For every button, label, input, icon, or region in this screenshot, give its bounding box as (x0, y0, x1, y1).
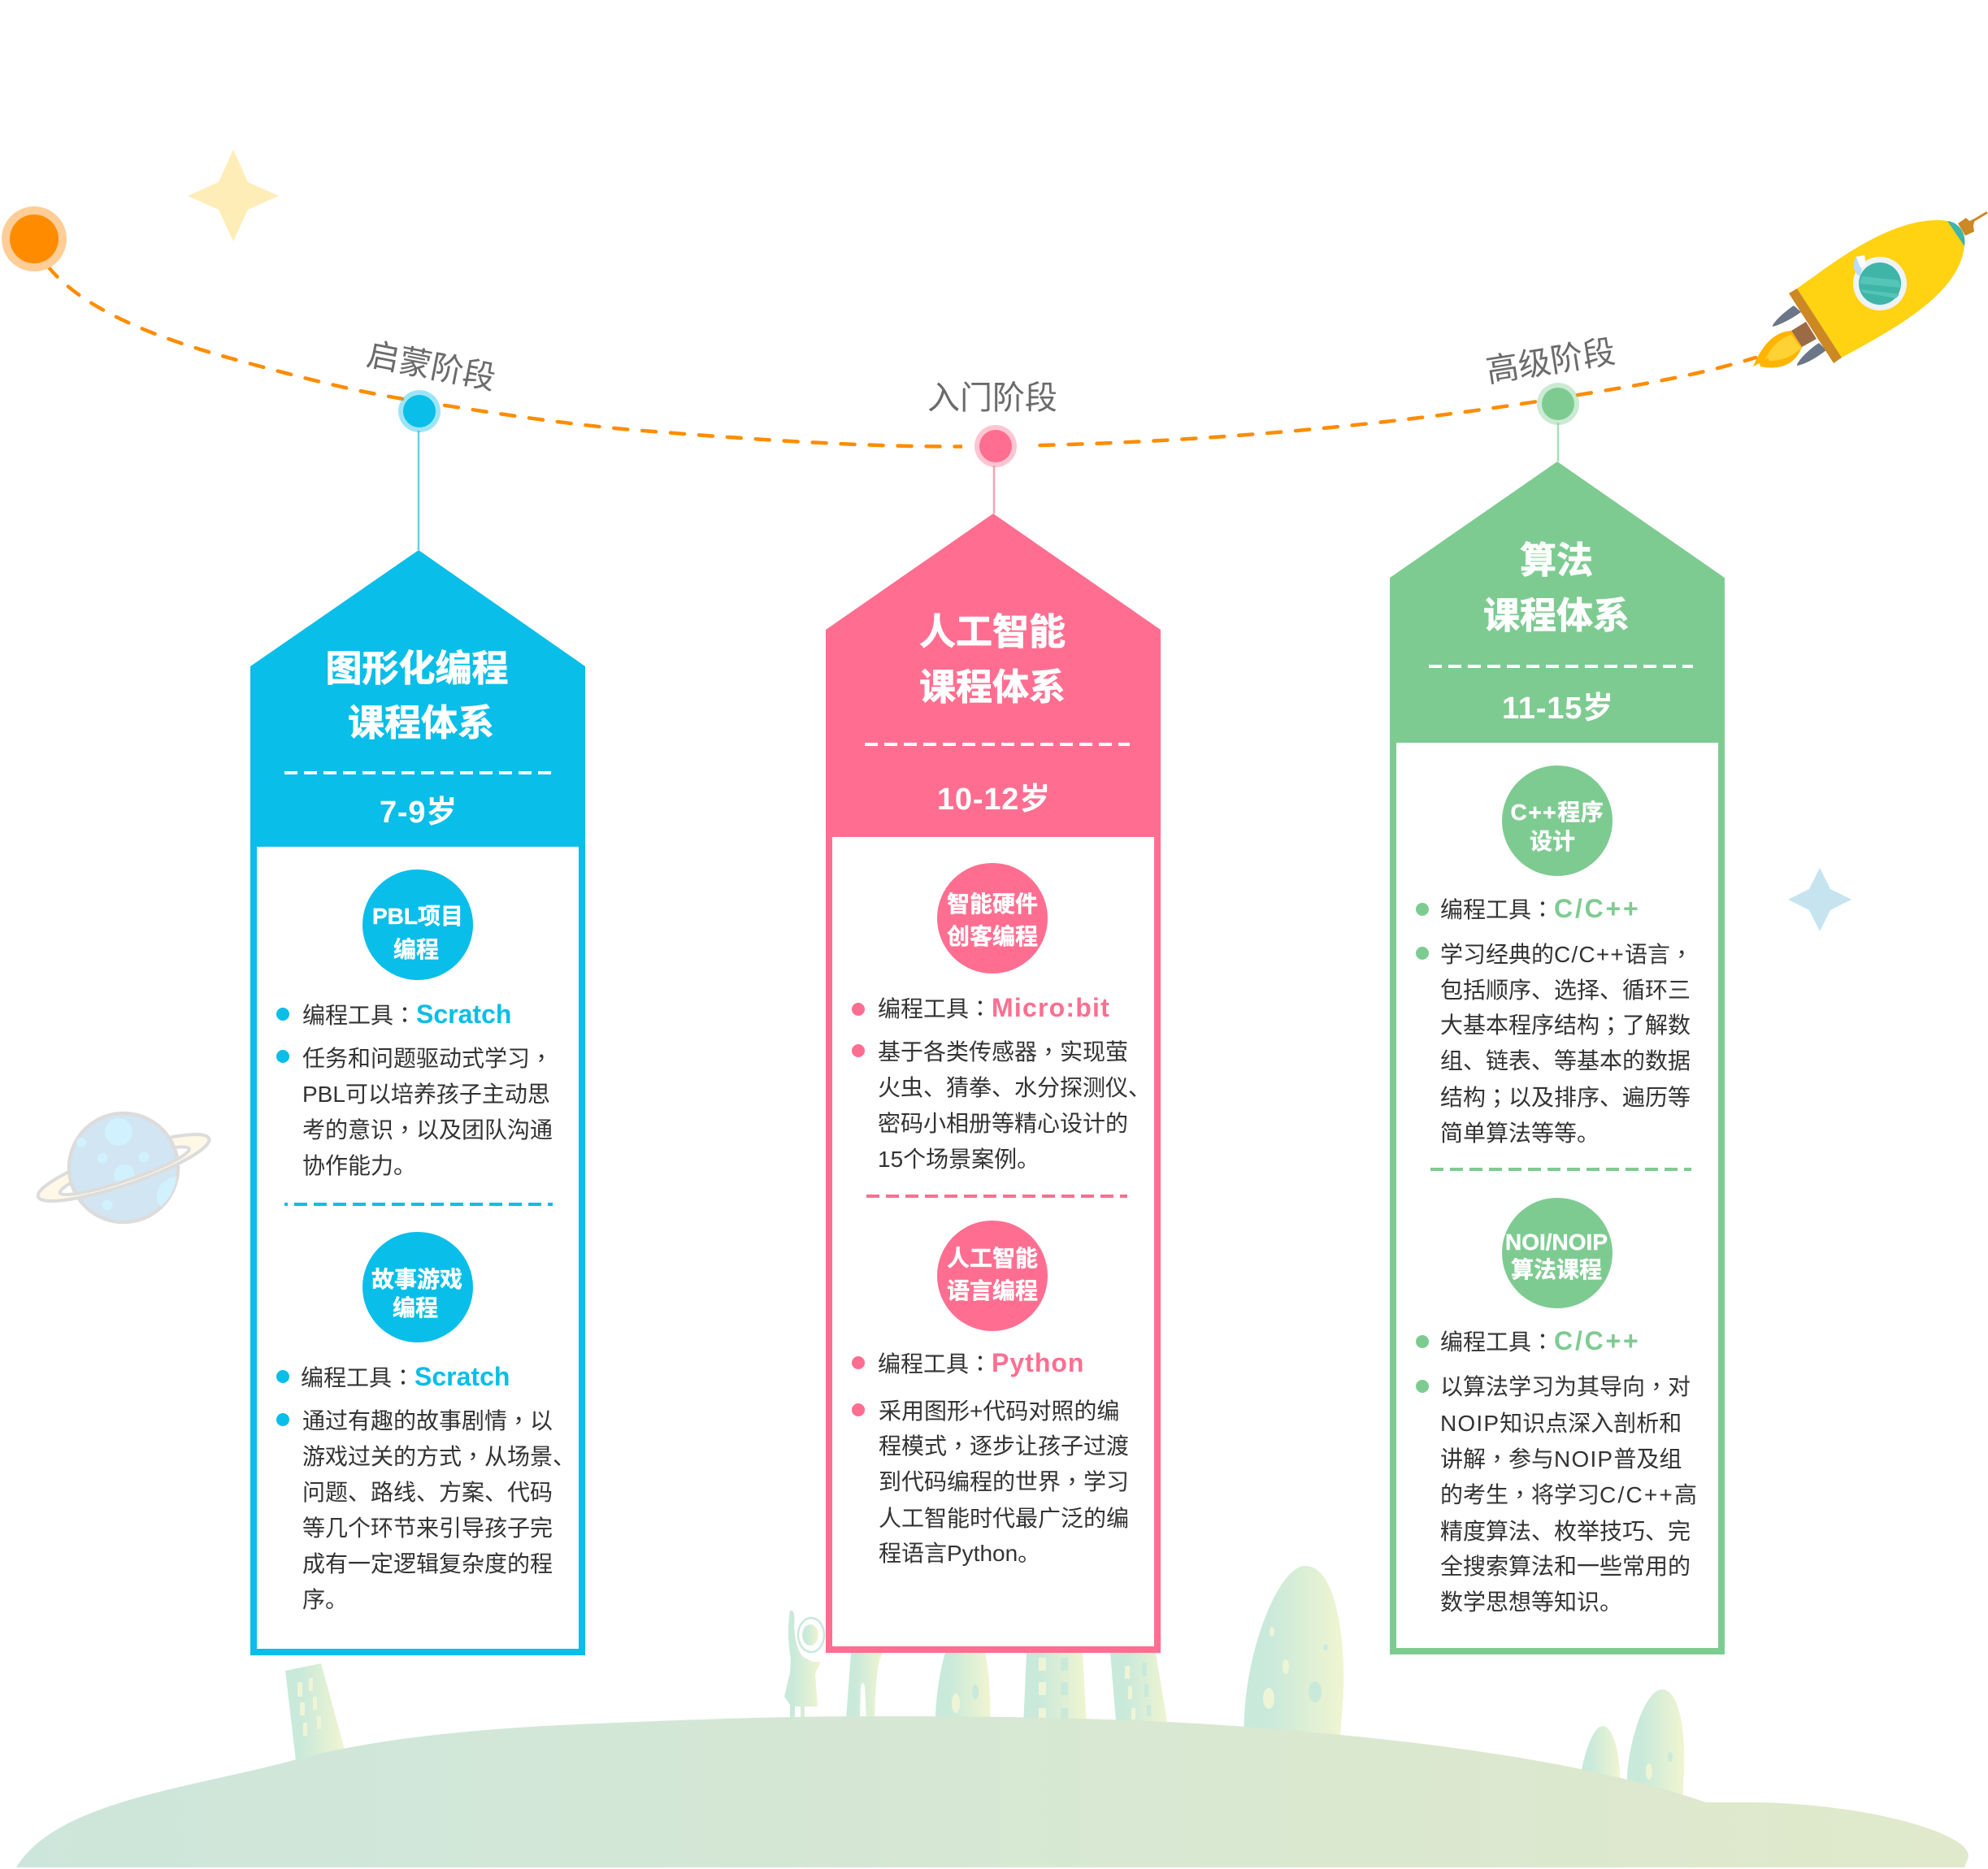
tree: large (1244, 1566, 1343, 1747)
heading: green panel (1483, 540, 1630, 636)
bullet list: 故事游戏: 等几个环节来引导孩子完 (302, 1516, 553, 1541)
bullet list: 故事游戏: 序。 (302, 1587, 348, 1612)
bullet list: PBL: 考的意识，以及团队沟通 (302, 1117, 553, 1143)
bullet list: 人工智能语言: 到代码编程的世界，学习 (879, 1469, 1129, 1494)
badge: 智能硬件创客编程: 创客编程 (947, 924, 1038, 949)
panel: 算法 (1390, 462, 1725, 1654)
bullet list: NOI: 全搜索算法和一些常用的 (1440, 1554, 1691, 1579)
badge: PBL项目编程 (362, 869, 473, 980)
bullet list: C++: 学习经典的C/C++语言， (1440, 942, 1693, 967)
heading: pink panel (919, 611, 1066, 708)
panel: 图形化编程 (250, 550, 585, 1655)
bullet list: 智能硬件 (852, 993, 1151, 1172)
decorative star: blue (1788, 868, 1851, 931)
badge: PBL项目编程: 编程 (393, 937, 439, 962)
heading: blue panel (325, 648, 509, 744)
figure: legs behind panel (846, 1653, 883, 1719)
bullet list: PBL: PBL可以培养孩子主动思 (302, 1082, 550, 1107)
bullet list: C++: 结构；以及排序、遍历等 (1440, 1085, 1691, 1110)
bullet list: NOI: 编程工具：C/C++ (1440, 1326, 1641, 1355)
tree: small (1580, 1726, 1620, 1788)
bullet list: NOI: 精度算法、枚举技巧、完 (1440, 1519, 1691, 1544)
bullet list: 故事游戏: 问题、路线、方案、代码 (302, 1480, 553, 1505)
bullet list: 故事游戏: 游戏过关的方式，从场景、 (302, 1444, 575, 1469)
bullet list: 人工智能语言: 人工智能时代最广泛的编 (879, 1506, 1129, 1531)
bullet list: C++ (1416, 894, 1693, 1146)
heading: blue panel: 图形化编程 (325, 648, 509, 689)
stage label: 入门阶段: 入门阶段 (927, 380, 1057, 416)
badge: 人工智能语言编程 (937, 1221, 1048, 1331)
bullet list: C++: 简单算法等等。 (1440, 1121, 1600, 1146)
heading: pink panel: 人工智能 (919, 611, 1066, 653)
bullet list: 人工智能语言 (852, 1348, 1129, 1566)
tree details (1263, 1627, 1673, 1780)
badge: NOI/NOIP算法课程: NOI/NOIP (1505, 1229, 1608, 1255)
bullet list: 人工智能语言: 采用图形+代码对照的编 (879, 1398, 1119, 1424)
bullet list: 人工智能语言: 程语言Python。 (879, 1541, 1040, 1566)
age: 10-12岁: 10-12岁 (937, 783, 1051, 817)
bullet list: PBL: 编程工具：Scratch (302, 1000, 511, 1029)
connector and node: pink (962, 413, 1029, 514)
heading: blue panel: 课程体系 (348, 702, 494, 744)
figure: person raising arms (784, 1611, 824, 1719)
icon: rocket (1753, 213, 1986, 367)
bullet list: C++: 组、链表、等基本的数据 (1440, 1048, 1691, 1073)
age: 11-15岁: 11-15岁 (1502, 692, 1614, 726)
heading: pink panel: 课程体系 (919, 666, 1066, 708)
decorative star: yellow (188, 150, 279, 241)
dashed orbit path (48, 267, 1756, 447)
badge: 人工智能语言编程: 人工智能 (947, 1246, 1038, 1271)
icon: ringed planet (33, 1113, 215, 1222)
connector and node: green (1537, 383, 1579, 462)
badge: 智能硬件创客编程 (937, 863, 1048, 974)
bullet list: 智能硬件: 基于各类传感器，实现萤 (878, 1039, 1128, 1065)
panel: 人工智能 (826, 514, 1161, 1653)
bullet list: 故事游戏 (276, 1362, 575, 1612)
building: rounded (935, 1653, 990, 1727)
bullet list: PBL (276, 1000, 553, 1178)
bullet list: C++: 编程工具：C/C++ (1440, 894, 1641, 923)
ground hill (16, 1716, 1968, 1867)
bullet list: C++: 大基本程序结构；了解数 (1440, 1013, 1691, 1038)
badge: NOI/NOIP算法课程 (1502, 1198, 1613, 1308)
badge: 故事游戏编程: 编程 (393, 1295, 438, 1320)
tree: medium (1627, 1689, 1684, 1804)
connector and node: blue (398, 390, 441, 550)
stage label: 启蒙阶段: 启蒙阶段 (364, 336, 498, 397)
bullet list: 人工智能语言: 程模式，逐步让孩子过渡 (879, 1433, 1129, 1459)
heading: green panel: 课程体系 (1483, 595, 1630, 636)
bullet list: 人工智能语言: 编程工具：Python (878, 1348, 1084, 1377)
building: right (1110, 1653, 1169, 1731)
bullet list: 故事游戏: 通过有趣的故事剧情，以 (302, 1408, 553, 1433)
bullet list: C++: 包括顺序、选择、循环三 (1440, 978, 1691, 1003)
bullet list: NOI: 的考生，将学习C/C++高 (1440, 1482, 1697, 1507)
stage label: 高级阶段: 高级阶段 (1484, 334, 1617, 389)
bullet list: PBL: 任务和问题驱动式学习， (302, 1046, 553, 1071)
badge: 智能硬件创客编程: 智能硬件 (947, 891, 1038, 917)
age: 7-9岁: 7-9岁 (380, 796, 458, 830)
badge: 人工智能语言编程: 语言编程 (947, 1278, 1038, 1303)
bullet list: 智能硬件: 15个场景案例。 (878, 1147, 1040, 1172)
badge: 故事游戏编程 (362, 1232, 473, 1342)
icon: sun (2, 206, 67, 271)
badge: PBL项目编程: PBL项目 (372, 904, 463, 929)
badge: 故事游戏编程: 故事游戏 (371, 1267, 462, 1292)
bullet list: 故事游戏: 编程工具：Scratch (301, 1362, 510, 1391)
bullet list: NOI: 以算法学习为其导向，对 (1440, 1374, 1691, 1399)
building: left (285, 1663, 345, 1767)
badge: C++程序设计 (1502, 765, 1613, 876)
badge: C++程序设计: 设计 (1530, 829, 1575, 854)
bullet list: NOI: 数学思想等知识。 (1440, 1589, 1622, 1615)
bullet list: NOI: 讲解，参与NOIP普及组 (1440, 1446, 1682, 1472)
bullet list: 故事游戏: 成有一定逻辑复杂度的程 (302, 1551, 553, 1576)
building: centre (1023, 1653, 1087, 1727)
bullet list: 智能硬件: 编程工具：Micro:bit (878, 993, 1110, 1022)
bullet list: 智能硬件: 密码小相册等精心设计的 (878, 1111, 1128, 1136)
bullet list: NOI: NOIP知识点深入剖析和 (1440, 1411, 1682, 1436)
bullet list: 智能硬件: 火虫、猜拳、水分探测仪、 (878, 1075, 1151, 1100)
badge: NOI/NOIP算法课程: 算法课程 (1511, 1257, 1602, 1282)
heading: green panel: 算法 (1520, 540, 1593, 581)
bullet list: NOI (1416, 1326, 1697, 1615)
badge: C++程序设计: C++程序 (1511, 800, 1604, 825)
bullet list: PBL: 协作能力。 (302, 1153, 416, 1178)
